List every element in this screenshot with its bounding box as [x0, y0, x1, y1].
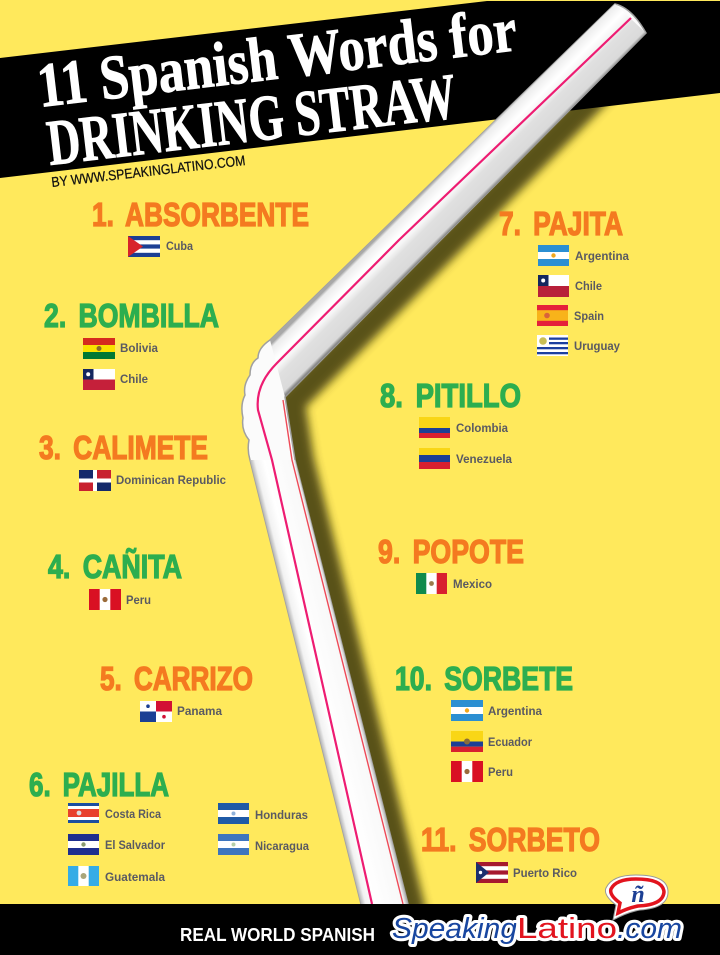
entry 1 [92, 196, 309, 257]
label: Puerto Rico [513, 866, 577, 880]
straw [242, 4, 646, 904]
label: Uruguay [574, 339, 620, 353]
flag: Peru [451, 761, 483, 782]
flag: Nicaragua [218, 834, 249, 855]
logo speech bubble [605, 875, 668, 920]
entry 6 [29, 766, 309, 886]
flag: Peru [89, 589, 121, 610]
label: Venezuela [456, 452, 512, 466]
flag: El Salvador [68, 834, 99, 855]
flag: Argentina [538, 245, 569, 266]
label: Spain [574, 309, 604, 323]
flag: Colombia [419, 417, 450, 438]
logo wordmark: Latino [517, 913, 617, 945]
title: DRINKING STRAW [43, 60, 460, 180]
label: Costa Rica [105, 807, 161, 821]
heading: 1. ABSORBENTE [92, 196, 309, 233]
entry 4 [48, 548, 182, 610]
entry 9 [378, 533, 524, 594]
heading: 3. CALIMETE [39, 429, 208, 466]
flag: Argentina [451, 700, 483, 721]
entry 11 [421, 821, 600, 883]
label: El Salvador [105, 838, 165, 852]
heading: 6. PAJILLA [29, 766, 169, 803]
title banner [0, 1, 720, 178]
label: Colombia [456, 421, 508, 435]
heading: 11. SORBETO [421, 821, 600, 858]
flag: Puerto Rico [476, 862, 508, 883]
heading: 10. SORBETE [395, 660, 573, 697]
flag: Mexico [416, 573, 447, 594]
label: Cuba [166, 239, 193, 253]
heading: 7. PAJITA [499, 205, 623, 242]
flag: Bolivia [83, 338, 115, 359]
label: Nicaragua [255, 839, 309, 853]
flag: Costa Rica [68, 803, 99, 823]
entry 8 [380, 377, 521, 469]
entry 5 [100, 660, 253, 722]
label: Ecuador [488, 735, 532, 749]
label: Argentina [488, 704, 542, 718]
flag: Panama [140, 701, 172, 722]
label: Bolivia [120, 341, 158, 355]
flag: Guatemala [68, 866, 99, 886]
flag: Uruguay [537, 335, 568, 356]
heading: 9. POPOTE [378, 533, 524, 570]
logo wordmark: Speaking [392, 913, 517, 945]
logo wordmark [392, 913, 682, 945]
entry 7 [499, 205, 629, 356]
entry 2 [44, 297, 219, 390]
label: Peru [488, 765, 513, 779]
heading: 5. CARRIZO [100, 660, 253, 697]
tagline: REAL WORLD SPANISH [180, 925, 375, 945]
label: Panama [177, 704, 222, 718]
entry 3 [39, 429, 226, 491]
heading: 4. CAÑITA [48, 548, 182, 585]
label: Chile [575, 279, 602, 293]
flag: Ecuador [451, 731, 483, 752]
flag: Dominican Republic [79, 470, 111, 491]
label: Peru [126, 593, 151, 607]
label: Dominican Republic [116, 473, 226, 487]
flag: Chile [538, 275, 569, 297]
flag: Honduras [218, 803, 249, 824]
logo wordmark: .com [617, 913, 682, 945]
straw edge stripe [283, 400, 403, 904]
label: Guatemala [105, 870, 165, 884]
label: Argentina [575, 249, 629, 263]
flag: Spain [537, 305, 568, 326]
heading: 8. PITILLO [380, 377, 521, 414]
entry 10 [395, 660, 573, 782]
title [33, 0, 520, 180]
label: Chile [120, 372, 148, 386]
flag: Cuba [128, 236, 160, 257]
logo speech bubble: ñ [631, 882, 645, 908]
flag: Venezuela [419, 448, 450, 469]
footer bar [0, 904, 720, 955]
flag: Chile [83, 369, 115, 390]
straw red stripe [258, 18, 631, 904]
label: Honduras [255, 808, 308, 822]
byline: BY WWW.SPEAKINGLATINO.COM [51, 152, 246, 190]
straw shadow [291, 40, 650, 916]
logo [392, 875, 682, 945]
label: Mexico [453, 577, 492, 591]
heading: 2. BOMBILLA [44, 297, 219, 334]
